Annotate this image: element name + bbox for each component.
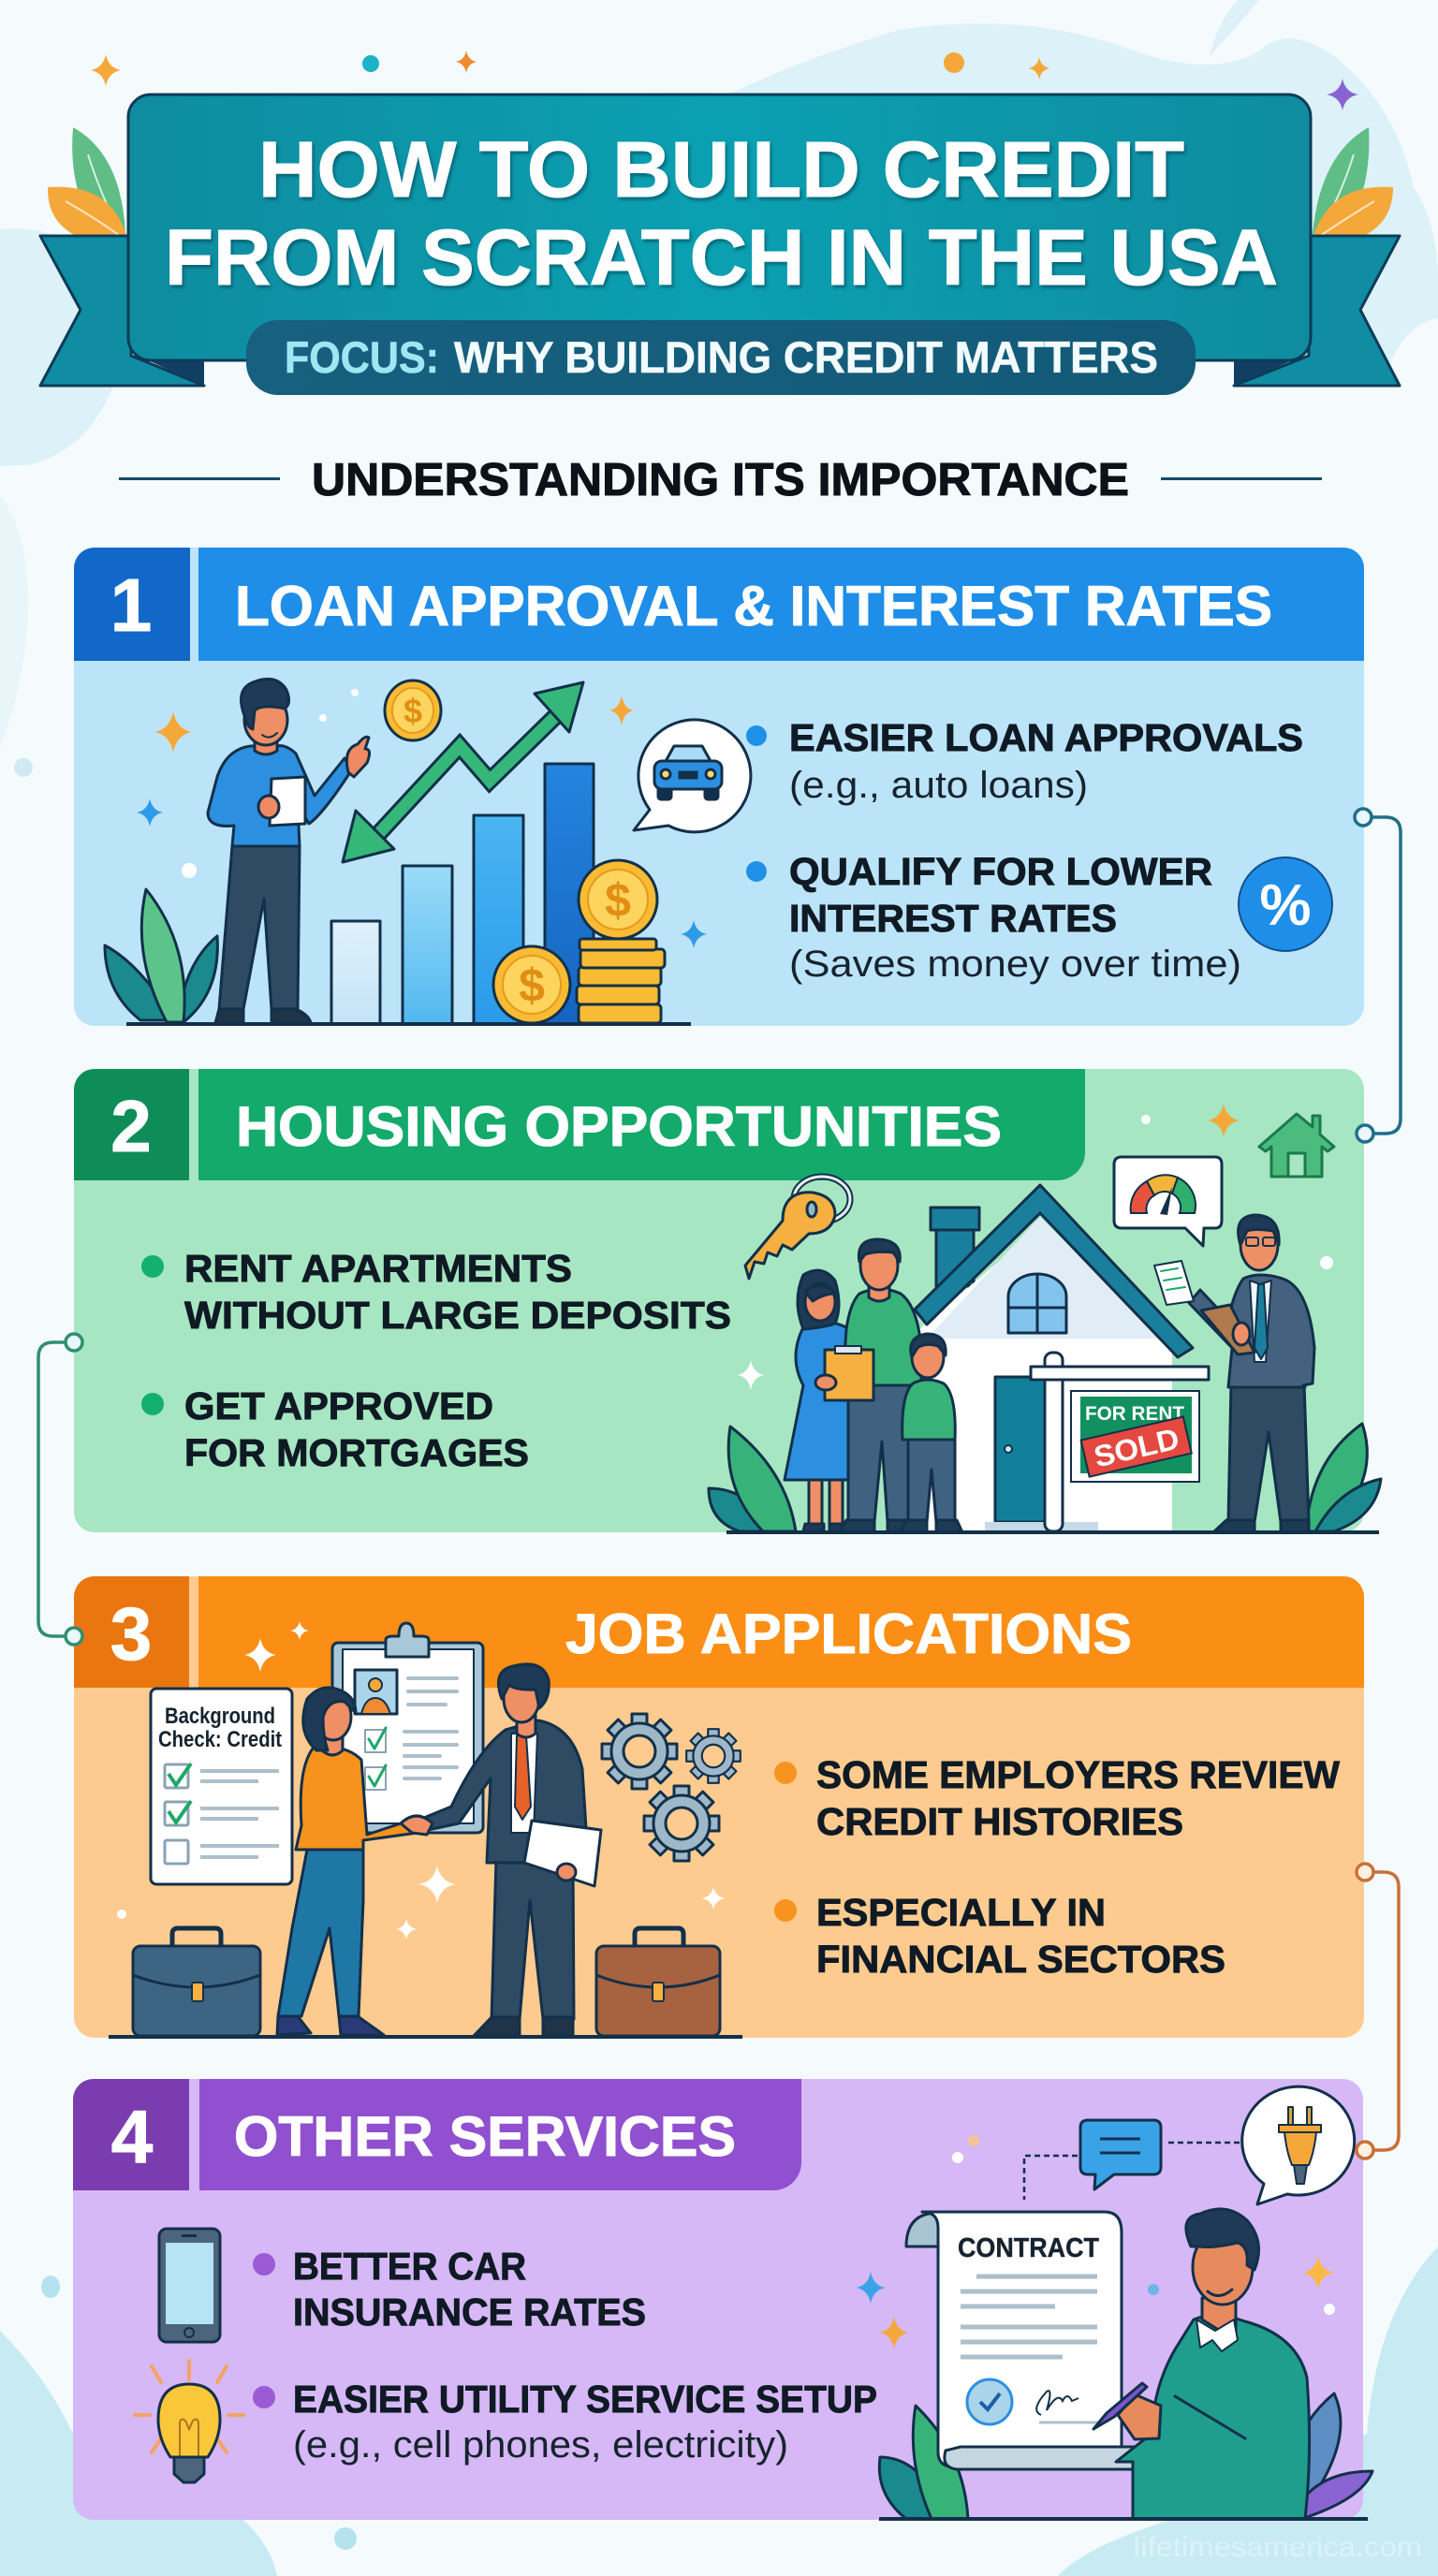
character: man in suit [401,1664,601,2036]
sold banner: SOLD [1091,1422,1182,1473]
header bar 2 [198,1069,1085,1180]
icon: clipboard with resume [332,1623,483,1833]
panel 1: loan approval and interest rates [74,548,1364,1026]
icon: percent badge [1239,857,1332,951]
sparkles [857,2135,1335,2349]
icon: percent badge: % [1259,873,1312,938]
bar chart [331,764,594,1024]
icon: brown briefcase [596,1928,720,2036]
sparkles [738,1104,1333,1390]
icon: gears [602,1714,741,1861]
right ribbon [1234,236,1400,386]
subtitle text: WHY BUILDING CREDIT MATTERS [454,332,1158,382]
banner panel [128,95,1311,360]
icon: plug speech bubble [1242,2086,1355,2204]
bullet: car insurance [253,2245,646,2334]
section heading [119,455,1322,505]
bullet: utility setup: EASIER UTILITY SERVICE SETUP [293,2378,877,2421]
icon: coins: $ [404,692,422,730]
panel 2: housing opportunities [74,1069,1381,1534]
roof [915,1185,1193,1357]
connector: panel 3 to panel 4 [1357,1864,1399,2159]
character: father [839,1239,921,1532]
sparkles [117,1621,726,1939]
door [995,1377,1053,1522]
bullet: lower interest rates: INTEREST RATES [789,897,1117,940]
icon: house [1259,1114,1334,1177]
ground line [126,1022,691,1026]
character: boy [901,1334,962,1532]
for rent sign [1031,1353,1209,1531]
icon: car speech bubble [634,720,751,832]
number 2: 2 [110,1085,152,1167]
plants [709,1424,1381,1531]
bullet: rent apartments [141,1247,731,1337]
connector: panel 2 to panel 3 [38,1334,82,1645]
character: woman's clipboard [815,1346,873,1400]
header bar 1 [198,548,1364,661]
character: woman [785,1270,861,1531]
bullet: employers review [774,1753,1340,1843]
icon: contract document [906,2212,1141,2469]
sold banner [1081,1416,1192,1477]
icon: background check card [151,1689,292,1884]
icon: phone [159,2229,220,2342]
bullet: car insurance: BETTER CAR [293,2245,526,2288]
watermark: lifetimesamerica.com [1134,2532,1422,2563]
heading 1: LOAN APPROVAL & INTEREST RATES [235,575,1272,637]
bullet: easier loan approvals: EASIER LOAN APPROVALS [789,716,1303,759]
title line 2: FROM SCRATCH IN THE USA [165,213,1278,301]
bullet: utility setup: (e.g., cell phones, electricity) [293,2424,788,2466]
ground line [879,2517,1368,2521]
bullet: rent apartments: WITHOUT LARGE DEPOSITS [184,1294,731,1337]
panel 4: other services [73,2079,1372,2521]
left ribbon [40,236,204,386]
bullet: lower interest rates: (Saves money over time) [789,944,1241,985]
subtitle pill [246,320,1196,395]
title banner [40,95,1400,395]
character: man [1093,2209,1310,2519]
card label [158,1704,282,1752]
bullet: easier loan approvals: (e.g., auto loans) [789,765,1088,806]
header bar 4 [199,2079,801,2190]
bullet: financial sectors: ESPECIALLY IN [816,1891,1106,1934]
icon: coins: $ [605,874,631,927]
ground line [726,1530,1379,1534]
window [1008,1274,1066,1333]
icon: credit score gauge bubble [1114,1157,1222,1246]
sparkles [137,689,707,948]
icon: car [654,746,722,799]
bullet: mortgages [141,1384,529,1474]
illustration: man signing contract [857,2086,1372,2521]
icon: coins [385,681,665,1023]
number block 1 [74,548,190,661]
bullet: mortgages: GET APPROVED [184,1384,493,1427]
card label: Background [165,1704,275,1729]
bullet: utility setup [253,2378,877,2466]
plants [879,2393,1372,2519]
subtitle label: FOCUS: [285,332,439,382]
character: man with paper [208,679,370,1023]
icon: key [745,1177,850,1279]
icon: blue briefcase [133,1928,260,2036]
heading 3: JOB APPLICATIONS [565,1603,1132,1665]
heading 2: HOUSING OPPORTUNITIES [236,1095,1002,1158]
seal [967,2379,1012,2424]
icon: coins: $ [519,959,545,1012]
heading 4: OTHER SERVICES [234,2105,736,2168]
section heading: UNDERSTANDING ITS IMPORTANCE [312,455,1129,505]
dashed connector lines [1024,2143,1241,2200]
arrow: zigzag trend [343,682,583,862]
header bar 3 [198,1576,1364,1688]
house [915,1185,1193,1532]
illustration: family, house and agent [709,1104,1381,1534]
connector: panel 1 to panel 2 [1355,809,1401,1142]
decorative sparkles above banner [91,51,1358,110]
number 1: 1 [110,564,152,647]
bullet: lower interest rates: QUALIFY FOR LOWER [789,850,1212,893]
bullet: financial sectors: FINANCIAL SECTORS [816,1938,1225,1981]
icon: light bulb [135,2361,243,2482]
icon: plug [1279,2107,1321,2184]
bullet: car insurance: INSURANCE RATES [293,2291,646,2334]
bullet: financial sectors [774,1891,1225,1981]
bullet: employers review: CREDIT HISTORIES [816,1800,1183,1843]
icon: right leaves [1313,127,1393,239]
contract title: CONTRACT [958,2233,1099,2263]
character: agent [1154,1215,1314,1532]
number block 3 [74,1576,189,1688]
icon: chat bubble [1080,2120,1161,2189]
for rent sign: FOR RENT [1085,1403,1184,1425]
card label: Check: Credit [158,1727,282,1752]
number 3: 3 [110,1592,152,1676]
bullet: easier loan approvals [746,716,1303,806]
number block 4 [73,2079,189,2190]
number block 2 [74,1069,189,1180]
icon: left leaves [48,127,127,239]
ground line [109,2035,742,2039]
bullet: lower interest rates [746,850,1241,985]
character: woman [277,1688,418,2035]
title line 1: HOW TO BUILD CREDIT [258,125,1184,213]
bullet: mortgages: FOR MORTGAGES [184,1431,529,1474]
panel 3: job applications [74,1576,1364,2039]
illustration: handshake [109,1621,742,2039]
number 4: 4 [111,2095,154,2178]
bullet: rent apartments: RENT APARTMENTS [184,1247,572,1290]
illustration: growth chart and man [105,679,751,1026]
bullet: employers review: SOME EMPLOYERS REVIEW [816,1753,1340,1796]
plant [105,889,217,1022]
